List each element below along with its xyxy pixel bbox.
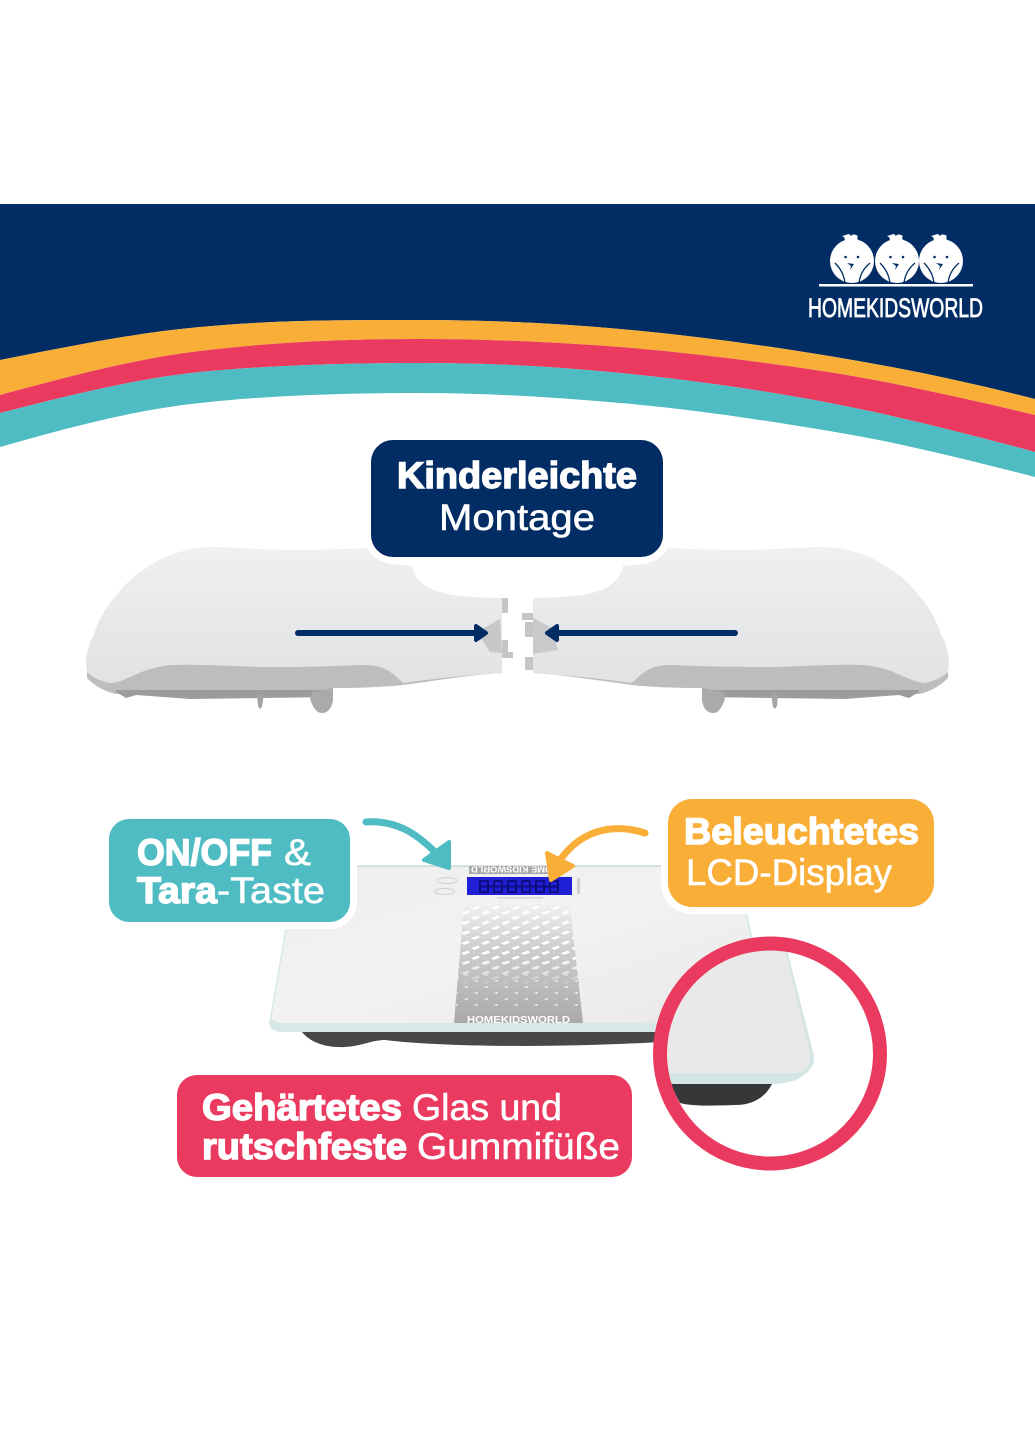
teal wave band <box>0 363 1035 477</box>
heading line 2: Montage <box>439 497 595 538</box>
pink callout: Gehärtetes Glas und rutschfeste Gummifüße <box>177 1075 632 1177</box>
pink wave band <box>0 339 1035 452</box>
arrow: pointing left <box>547 626 735 640</box>
teal callout: ON/OFF & Tara-Taste: -Taste <box>217 870 325 911</box>
bathroom scale <box>269 864 768 1047</box>
unit label <box>577 878 580 894</box>
orange callout: Beleuchtetes LCD-Display: Beleuchtetes <box>684 811 919 852</box>
touch buttons <box>434 878 457 894</box>
connector socket <box>533 618 558 654</box>
teal callout: ON/OFF & Tara-Taste <box>109 819 350 922</box>
connector socket <box>477 619 502 653</box>
orange wave band <box>0 320 1035 415</box>
logo: HOMEKIDSWORLD <box>808 234 983 323</box>
rainbow wave <box>0 320 1035 477</box>
orange callout: Beleuchtetes LCD-Display <box>668 799 934 907</box>
arrow: teal to buttons <box>366 822 449 868</box>
LCD caption <box>497 897 543 898</box>
pink lens ring <box>660 944 880 1164</box>
connector tabs <box>522 613 533 670</box>
right scale half <box>522 547 949 713</box>
teal callout: ON/OFF & Tara-Taste: & <box>284 832 311 873</box>
teal callout: ON/OFF & Tara-Taste: Tara <box>137 870 217 911</box>
heading box: Kinderleichte Montage <box>371 440 663 557</box>
icon: three chicks <box>830 234 963 283</box>
pink callout: Gehärtetes Glas und rutschfeste Gummifüße: Gummifüße <box>417 1126 620 1167</box>
teal callout: ON/OFF & Tara-Taste: ON/OFF <box>137 832 272 873</box>
LCD display <box>467 877 572 895</box>
zoomed glass and foot <box>667 950 814 1106</box>
glass edge <box>269 866 768 1032</box>
connector tabs <box>502 598 513 658</box>
pink callout: Gehärtetes Glas und rutschfeste Gummifüße: Glas und <box>412 1087 562 1128</box>
mirrored brand label: HOME KIDSWORLD <box>471 864 559 874</box>
scale rubber foot <box>302 1032 690 1047</box>
glass surface <box>272 867 765 1023</box>
orange callout: Beleuchtetes LCD-Display: LCD-Display <box>686 852 892 893</box>
logo baseline <box>819 284 973 286</box>
heading line 1: Kinderleichte <box>397 455 637 496</box>
scale brand print: HOMEKIDSWORLD <box>467 1014 570 1026</box>
header banner <box>0 204 1035 399</box>
magnified corner detail <box>640 930 880 1164</box>
arrow: orange to display <box>547 829 645 880</box>
silver pattern strip <box>454 905 583 1026</box>
pink callout: Gehärtetes Glas und rutschfeste Gummifüße: Gehärtetes <box>202 1087 402 1128</box>
pink callout: Gehärtetes Glas und rutschfeste Gummifüße: rutschfeste <box>202 1126 407 1167</box>
left scale half <box>86 547 513 713</box>
arrow: pointing right <box>298 626 486 640</box>
